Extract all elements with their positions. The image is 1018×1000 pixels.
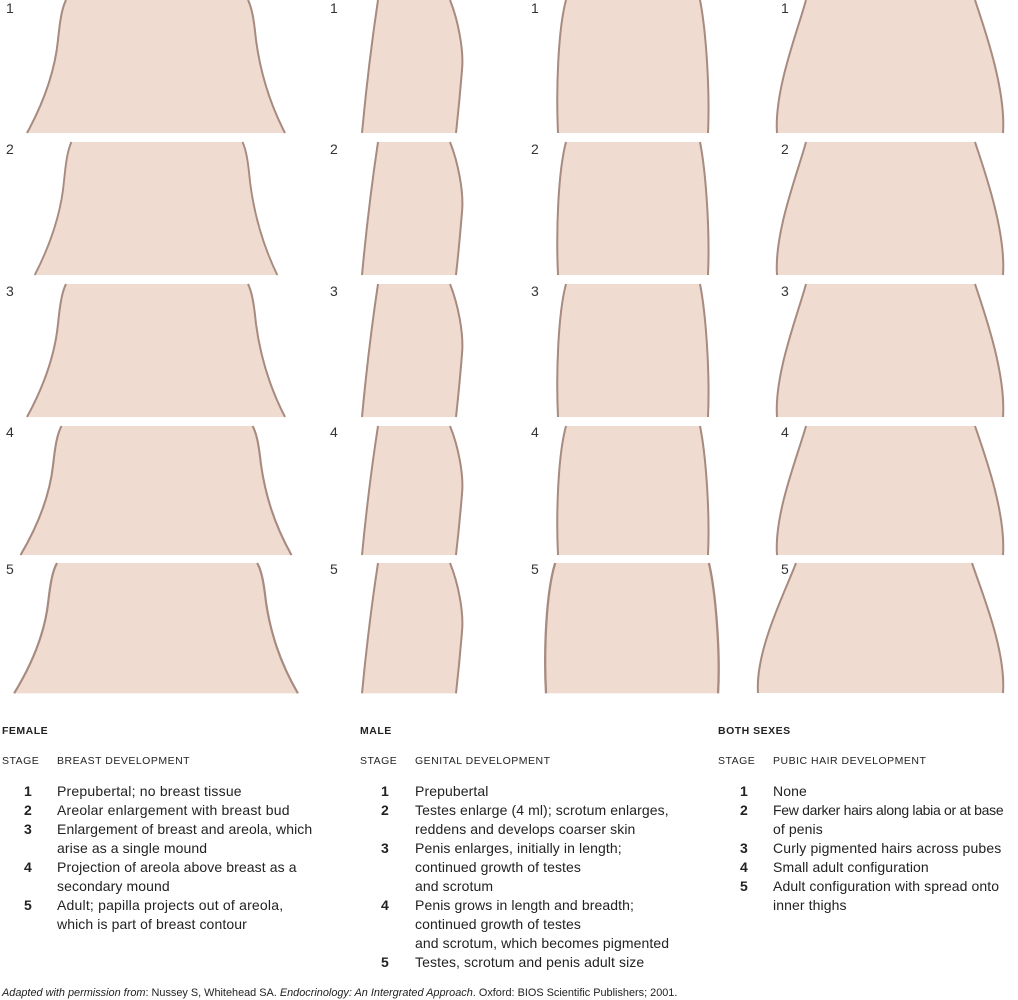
text: 2 (6, 141, 14, 157)
stage numbers: column 3 (531, 0, 539, 577)
stage numbers: column 4 (781, 0, 789, 577)
text: Enlargement of breast and areola, which (57, 821, 312, 837)
text: 1 (381, 783, 389, 799)
text: 5 (381, 954, 389, 970)
text: 3 (330, 283, 338, 299)
text: 2 (381, 802, 389, 818)
text: Areolar enlargement with breast bud (57, 802, 290, 818)
text: 1 (740, 783, 748, 799)
text: Penis enlarges, initially in length; (415, 840, 622, 856)
text: MALE (360, 725, 392, 737)
text: continued growth of testes (415, 916, 581, 932)
text: and scrotum, which becomes pigmented (415, 935, 669, 951)
column: female torso silhouettes, front view (14, 0, 298, 693)
text: 5 (6, 561, 14, 577)
text: 1 (6, 0, 14, 16)
text: 2 (740, 802, 748, 818)
text: 2 (781, 141, 789, 157)
text: 3 (381, 840, 389, 856)
text: BOTH SEXES (718, 725, 791, 737)
text: Small adult configuration (773, 859, 929, 875)
text: Testes enlarge (4 ml); scrotum enlarges, (415, 802, 669, 818)
text: inner thighs (773, 897, 847, 913)
text: STAGE (2, 755, 39, 767)
text: continued growth of testes (415, 859, 581, 875)
text: FEMALE (2, 725, 48, 737)
text: 5 (740, 878, 748, 894)
text: 4 (781, 424, 789, 440)
text: 3 (781, 283, 789, 299)
text: 1 (24, 783, 32, 799)
text: None (773, 783, 807, 799)
text: of penis (773, 821, 823, 837)
text: 4 (381, 897, 389, 913)
text block: both sexes pubic hair development (718, 725, 1004, 913)
text: reddens and develops coarser skin (415, 821, 635, 837)
text: Penis grows in length and breadth; (415, 897, 634, 913)
text: 5 (781, 561, 789, 577)
text: 4 (531, 424, 539, 440)
text: PUBIC HAIR DEVELOPMENT (773, 755, 926, 767)
text: STAGE (718, 755, 755, 767)
text: 5 (24, 897, 32, 913)
text: 4 (6, 424, 14, 440)
text: Testes, scrotum and penis adult size (415, 954, 644, 970)
text: Curly pigmented hairs across pubes (773, 840, 1001, 856)
text: 3 (6, 283, 14, 299)
text block: male genital development (360, 725, 669, 970)
text: secondary mound (57, 878, 170, 894)
text: and scrotum (415, 878, 493, 894)
column: lower body silhouettes, third set (545, 0, 719, 693)
column: lower body silhouettes, fourth set (758, 0, 1003, 693)
text: 1 (781, 0, 789, 16)
text: 3 (740, 840, 748, 856)
text: Projection of areola above breast as a (57, 859, 297, 875)
text: 3 (24, 821, 32, 837)
source citation: Adapted with permission from: Nussey S, Whitehead SA. Endocrinology: An Intergrated Approach. Oxford: BIOS Scientific Publishers; 2001. (2, 987, 677, 999)
stage numbers: column 1 (6, 0, 14, 577)
text: 2 (24, 802, 32, 818)
figure panels: neutral body silhouettes (13, 0, 1004, 694)
text: 4 (330, 424, 338, 440)
text: arise as a single mound (57, 840, 207, 856)
text block: female breast development (2, 725, 312, 932)
text: Adult; papilla projects out of areola, (57, 897, 283, 913)
text: Adult configuration with spread onto (773, 878, 999, 894)
stage numbers: column 2 (330, 0, 338, 577)
text: BREAST DEVELOPMENT (57, 755, 190, 767)
text: 2 (330, 141, 338, 157)
text: which is part of breast contour (57, 916, 247, 932)
text: 5 (330, 561, 338, 577)
text: 3 (531, 283, 539, 299)
text: 1 (330, 0, 338, 16)
text: 4 (740, 859, 748, 875)
text: Few darker hairs along labia or at base (773, 802, 1003, 818)
text: 2 (531, 141, 539, 157)
text: Prepubertal (415, 783, 488, 799)
text: GENITAL DEVELOPMENT (415, 755, 551, 767)
text: 5 (531, 561, 539, 577)
text: Prepubertal; no breast tissue (57, 783, 242, 799)
text: 4 (24, 859, 32, 875)
text: 1 (531, 0, 539, 16)
text: STAGE (360, 755, 397, 767)
column: female torso silhouettes, side view (362, 0, 462, 693)
